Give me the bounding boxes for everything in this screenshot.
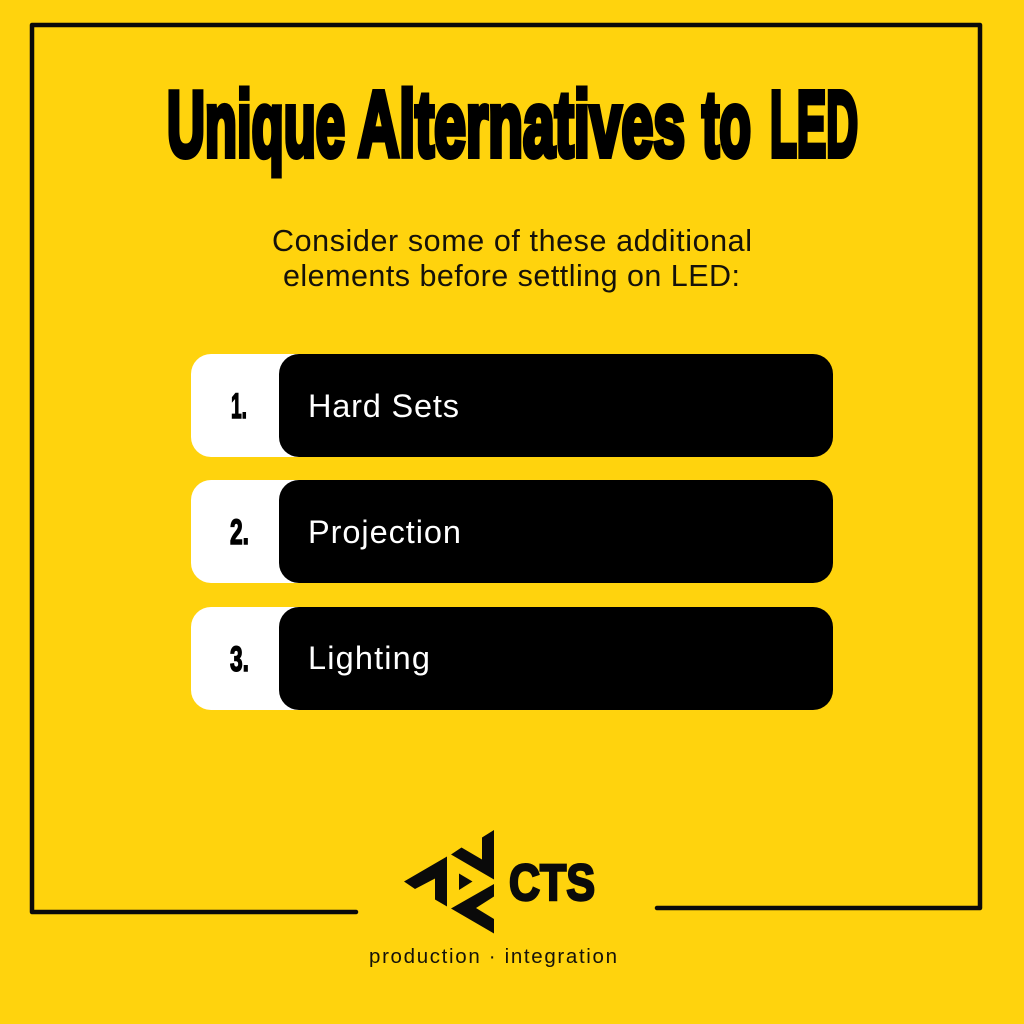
title (167, 72, 858, 176)
intro text (272, 224, 752, 293)
intro text: Consider some of these additional (272, 224, 752, 258)
list item 1 (191, 354, 833, 457)
list item 1: Hard Sets (308, 388, 459, 424)
logo tagline: production · integration (369, 945, 617, 968)
title: to (702, 72, 751, 176)
title: Alternatives (358, 72, 685, 176)
list item 1: 1. (231, 387, 247, 426)
intro text: elements before settling on LED: (283, 259, 740, 293)
list item 3: 3. (230, 640, 249, 679)
list item 3 (191, 607, 833, 710)
list item 2: Projection (308, 514, 461, 550)
list item 2 (191, 480, 833, 583)
title: Unique (167, 72, 345, 176)
logo wordmark: CTS (509, 854, 595, 911)
logo (369, 830, 617, 968)
text: LED (770, 72, 858, 176)
list item 3: Lighting (308, 640, 430, 676)
list item 2: 2. (230, 513, 249, 552)
icon: triangular logo mark (404, 830, 494, 934)
